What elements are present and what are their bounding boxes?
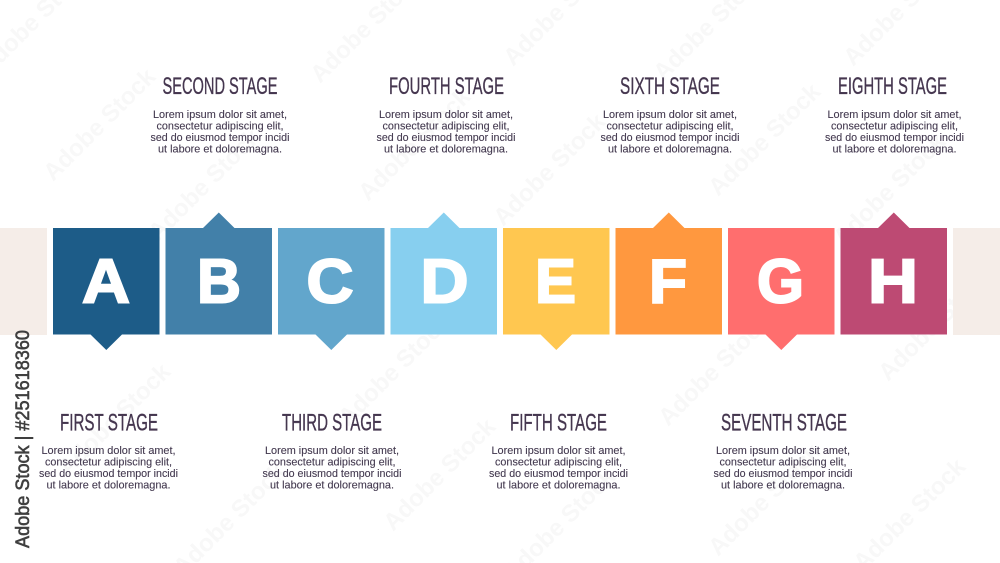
text: Adobe Stock: [333, 308, 457, 431]
block E with down arrow: E: [535, 248, 576, 316]
text block: first stage: consectetur adipiscing elit,: [45, 456, 172, 468]
text block: second stage: [150, 73, 290, 156]
block H with up arrow: H: [868, 248, 918, 316]
block G with down arrow: [728, 228, 834, 350]
text block: eighth stage: consectetur adipiscing elit,: [831, 120, 958, 132]
text block: seventh stage: Lorem ipsum dolor sit amet,: [716, 445, 850, 457]
text block: seventh stage: sed do eiusmod tempor incidi: [714, 468, 852, 480]
block G with down arrow: G: [757, 248, 804, 316]
text block: third stage: Lorem ipsum dolor sit amet,: [265, 445, 399, 457]
text block: first stage: [39, 410, 178, 492]
text block: fourth stage: sed do eiusmod tempor incidi: [376, 132, 516, 144]
block D with up arrow: D: [420, 248, 468, 316]
text block: eighth stage: ut labore et doloremagna.: [832, 144, 956, 156]
text block: second stage: sed do eiusmod tempor incidi: [150, 132, 290, 144]
text block: second stage: SECOND STAGE: [162, 73, 278, 100]
block C with down arrow: C: [306, 248, 354, 316]
text block: sixth stage: ut labore et doloremagna.: [608, 144, 732, 156]
text block: fourth stage: consectetur adipiscing elit,: [382, 120, 510, 132]
text: Adobe Stock: [703, 438, 827, 561]
block D with up arrow: [390, 212, 497, 334]
text block: sixth stage: Lorem ipsum dolor sit amet,: [603, 109, 737, 121]
text block: eighth stage: Lorem ipsum dolor sit amet,: [828, 109, 962, 121]
text block: sixth stage: [600, 73, 740, 156]
text block: seventh stage: [714, 410, 852, 492]
block A with down arrow: [53, 228, 160, 350]
text block: first stage: Lorem ipsum dolor sit amet,: [42, 445, 176, 457]
text block: fifth stage: [489, 410, 628, 492]
text: Adobe Stock: [873, 263, 997, 386]
text block: seventh stage: SEVENTH STAGE: [721, 410, 847, 436]
block F with up arrow: [616, 212, 722, 334]
text: Adobe Stock: [353, 83, 477, 206]
text block: fourth stage: Lorem ipsum dolor sit amet,: [379, 109, 513, 121]
text block: fifth stage: ut labore et doloremagna.: [496, 480, 620, 492]
left background band: [0, 228, 47, 335]
text block: third stage: sed do eiusmod tempor incidi: [262, 468, 402, 480]
text block: fourth stage: ut labore et doloremagna.: [384, 144, 508, 156]
block E with down arrow: [503, 228, 610, 350]
text block: fifth stage: consectetur adipiscing elit,: [495, 456, 622, 468]
text block: third stage: THIRD STAGE: [282, 410, 382, 436]
text block: sixth stage: consectetur adipiscing elit,: [606, 120, 734, 132]
text: Adobe Stock: [143, 123, 267, 246]
text: Adobe Stock: [378, 413, 502, 536]
block B with up arrow: B: [197, 248, 241, 316]
block A with down arrow: A: [82, 248, 130, 316]
text block: fourth stage: [376, 73, 516, 156]
text block: first stage: sed do eiusmod tempor incidi: [39, 468, 178, 480]
text: Adobe Stock: [488, 108, 612, 231]
text: Adobe Stock: [53, 358, 177, 481]
vertical stock credit: Adobe Stock | #251618360: [13, 330, 34, 548]
text: Adobe Stock: [703, 78, 827, 201]
text block: sixth stage: SIXTH STAGE: [620, 73, 720, 100]
text block: third stage: [262, 410, 402, 492]
right background band: [953, 228, 1000, 335]
text: Adobe Stock: [38, 63, 162, 186]
text block: third stage: ut labore et doloremagna.: [270, 480, 394, 492]
text block: first stage: ut labore et doloremagna.: [46, 480, 170, 492]
text block: fifth stage: FIFTH STAGE: [510, 410, 607, 436]
text block: second stage: ut labore et doloremagna.: [158, 144, 282, 156]
text block: second stage: Lorem ipsum dolor sit amet,: [153, 109, 287, 121]
text block: fifth stage: Lorem ipsum dolor sit amet,: [492, 445, 626, 457]
text block: first stage: FIRST STAGE: [60, 410, 158, 436]
text block: third stage: consectetur adipiscing elit,: [268, 456, 396, 468]
text block: eighth stage: [825, 73, 964, 156]
text block: sixth stage: sed do eiusmod tempor incidi: [600, 132, 740, 144]
text block: second stage: consectetur adipiscing elit,: [156, 120, 284, 132]
block F with up arrow: F: [649, 248, 687, 316]
text block: seventh stage: consectetur adipiscing elit,: [720, 456, 846, 468]
block C with down arrow: [278, 228, 384, 350]
block H with up arrow: [840, 212, 947, 334]
text: Adobe Stock: [828, 128, 952, 251]
text: Adobe Stock: [653, 308, 777, 431]
text block: fourth stage: FOURTH STAGE: [389, 73, 504, 100]
text block: fifth stage: sed do eiusmod tempor incidi: [489, 468, 628, 480]
text block: seventh stage: ut labore et doloremagna.: [721, 480, 845, 492]
text block: eighth stage: sed do eiusmod tempor incidi: [825, 132, 964, 144]
block B with up arrow: [166, 212, 272, 334]
